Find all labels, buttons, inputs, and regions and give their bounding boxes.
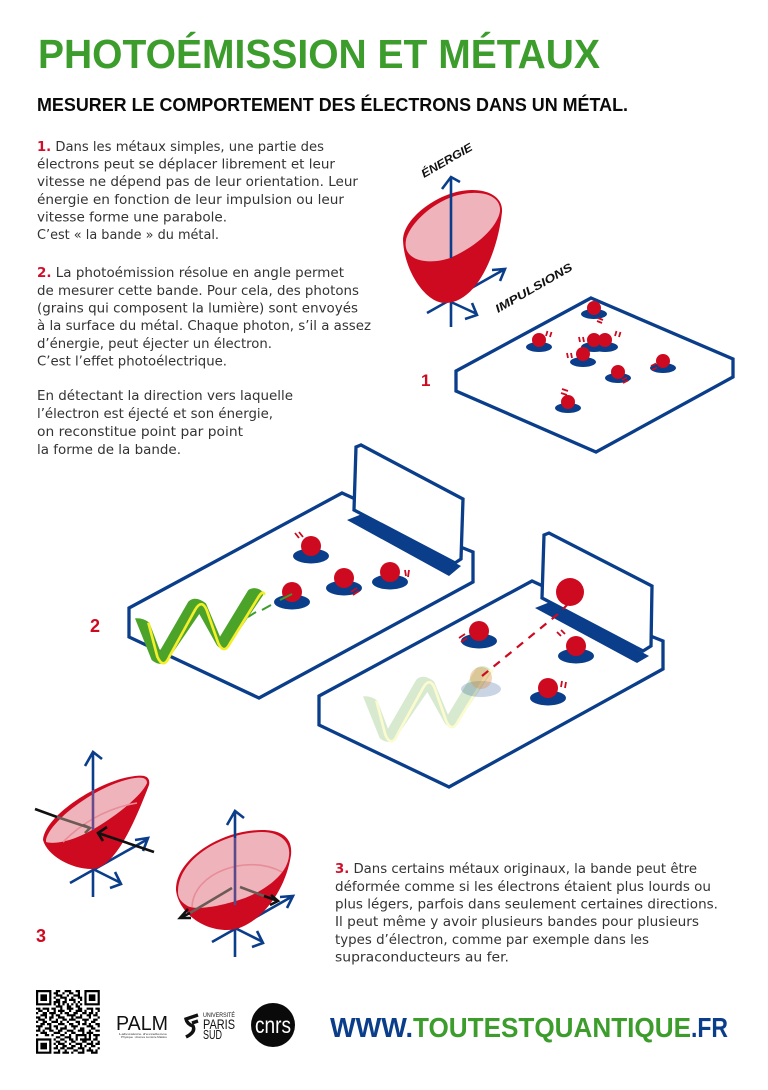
- text block: paragraph 3: types d’électron, comme par exemple dans les: [335, 933, 649, 948]
- logo: CNRS: [251, 1003, 295, 1047]
- ghost electron at origin: [461, 667, 501, 697]
- logo: Université Paris Sud: SUD: [203, 1027, 222, 1042]
- text block: paragraph 2: C’est l’effet photoélectrique.: [37, 354, 227, 370]
- electrons on surface 1: [526, 301, 676, 413]
- text block: paragraph 1: vitesse ne dépend pas de leur orientation. Leur: [37, 175, 359, 190]
- axis label: momentum: IMPULSIONS: [494, 262, 575, 316]
- text block: detection paragraph: on reconstitue point par point: [37, 425, 243, 440]
- text block: paragraph 3: déformée comme si les électrons étaient plus lourds ou: [335, 880, 711, 895]
- logo: PALM: Physique : Atomes Lumière Matière: [121, 1035, 167, 1039]
- title: PHOTOÉMISSION ET MÉTAUX: [38, 31, 600, 77]
- electrons on surface 2: [274, 532, 409, 610]
- text block: detection paragraph: [37, 389, 293, 458]
- text block: paragraph 1: 1. Dans les métaux simples, une partie des: [37, 140, 324, 155]
- logo: Université Paris Sud: PARIS: [203, 1016, 235, 1032]
- text block: paragraph 2: à la surface du métal. Chaque photon, s’il a assez: [37, 319, 371, 334]
- text block: paragraph 2: (grains qui composent la lumière) sont envoyés: [37, 302, 358, 316]
- detector screen: [542, 533, 652, 651]
- text block: paragraph 3: [335, 862, 718, 966]
- text block: paragraph 2: de mesurer cette bande. Pour cela, des photons: [37, 284, 359, 299]
- text block: paragraph 1: énergie en fonction de leur impulsion ou leur: [37, 193, 345, 208]
- panel 2: photon hitting the metal: [129, 445, 473, 698]
- parabola 3b: deformed band: [176, 811, 293, 957]
- ejected electron: [556, 578, 584, 606]
- panel 1: free electrons on a surface: [456, 298, 733, 452]
- parabola 3a: deformed band: [35, 752, 154, 897]
- text block: paragraph 3: Il peut même y avoir plusieurs bandes pour plusieurs: [335, 915, 699, 930]
- photon wave: [135, 588, 264, 664]
- text block: paragraph 2: 2. La photoémission résolue en angle permet: [37, 266, 344, 281]
- detector base: [535, 602, 649, 663]
- photon path dashes: [248, 594, 292, 617]
- electron path dashes: [482, 605, 567, 676]
- text block: detection paragraph: la forme de la bande.: [37, 443, 181, 458]
- axis label: energy: ÉNERGIE: [419, 141, 475, 181]
- website URL: WWW.: [330, 1012, 413, 1043]
- website URL: TOUTESTQUANTIQUE: [413, 1012, 691, 1043]
- text block: paragraph 1: électrons peut se déplacer librement et leur: [37, 158, 336, 172]
- axis arrows in black: [180, 887, 278, 918]
- number 2: 2: [90, 616, 100, 636]
- text block: paragraph 3: supraconducteurs au fer.: [335, 950, 509, 966]
- text block: paragraph 2: [37, 266, 371, 370]
- logo: PALM: Laboratoire d'excellence: [119, 1032, 168, 1036]
- QR code: [36, 991, 100, 1053]
- logo: CNRS: cnrs: [255, 1012, 291, 1038]
- axis arrows in black: [35, 809, 154, 852]
- website URL: .FR: [691, 1012, 728, 1043]
- number 3: 3: [36, 926, 46, 946]
- text block: paragraph 1: [37, 140, 359, 243]
- text block: detection paragraph: En détectant la direction vers laquelle: [37, 389, 293, 404]
- number 1: 1: [421, 371, 430, 390]
- text block: paragraph 3: plus légers, parfois dans seulement certaines directions.: [335, 898, 718, 912]
- panel 2b: electron ejected to the detector: [319, 533, 663, 787]
- detector screen: [354, 445, 463, 563]
- text block: paragraph 1: C’est « la bande » du métal.: [37, 228, 219, 243]
- icon: parabola band with energy and momentum axes: [403, 177, 505, 327]
- electrons on surface 3: [459, 621, 594, 706]
- detector base: [347, 514, 461, 576]
- logo: Université Paris Sud: UNIVERSITÉ: [203, 1010, 236, 1019]
- text block: paragraph 1: vitesse forme une parabole.: [37, 210, 227, 226]
- subtitle: MESURER LE COMPORTEMENT DES ÉLECTRONS DANS UN MÉTAL.: [37, 94, 628, 115]
- faded photon wave: [363, 666, 492, 742]
- text block: paragraph 2: d’énergie, peut éjecter un électron.: [37, 337, 272, 352]
- logo: PALM: PALM: [116, 1013, 168, 1035]
- text block: detection paragraph: l’électron est éjecté et son énergie,: [37, 407, 273, 422]
- text block: paragraph 3: 3. Dans certains métaux originaux, la bande peut être: [335, 862, 697, 877]
- logo: Université Paris Sud: [186, 1010, 236, 1042]
